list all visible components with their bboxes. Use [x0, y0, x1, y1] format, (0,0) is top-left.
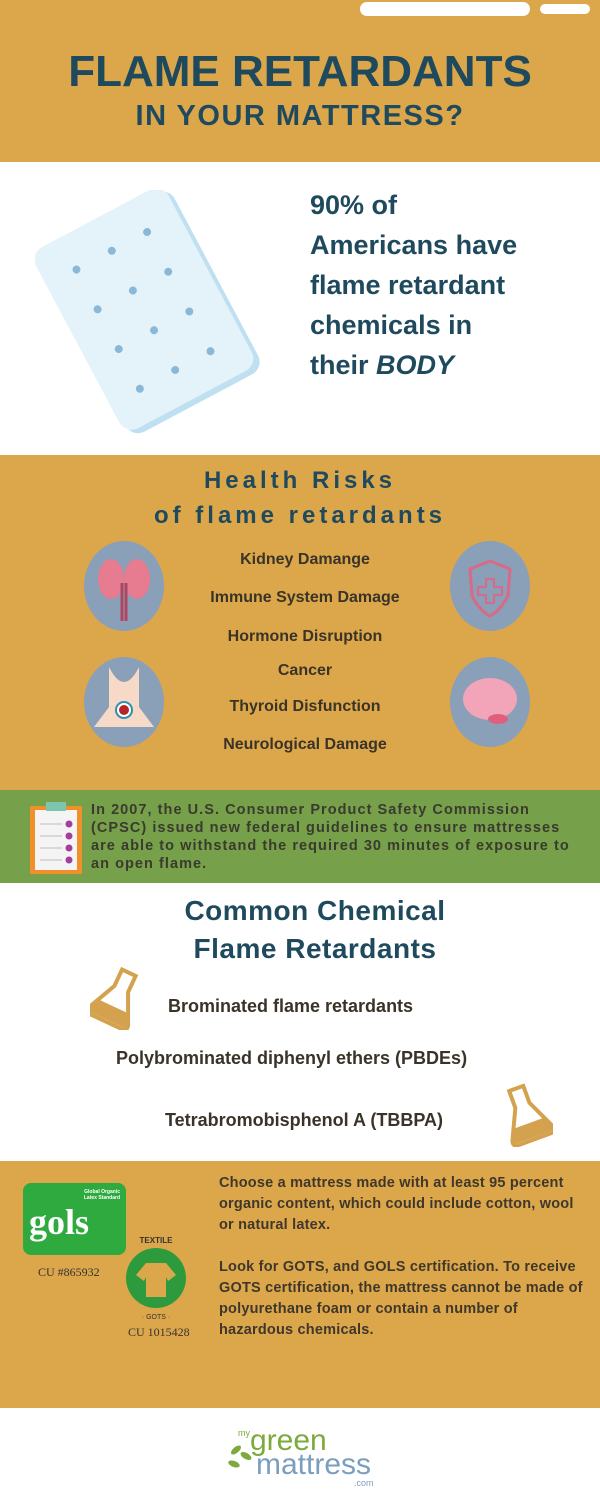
risk list: Kidney Damange	[240, 551, 370, 568]
icon: flask 1	[90, 966, 138, 1030]
title: IN YOUR MATTRESS?	[136, 100, 464, 132]
text: Polybrominated diphenyl ethers (PBDEs)	[116, 1048, 467, 1068]
title: FLAME RETARDANTS	[68, 47, 532, 96]
note text	[91, 802, 570, 872]
advice text: hazardous chemicals.	[219, 1322, 374, 1338]
stat text: Americans have	[310, 230, 517, 260]
advice text: Look for GOTS, and GOLS certification. To receive	[219, 1259, 576, 1275]
cloud decoration	[360, 2, 590, 16]
logo: mygreenmattress: green	[250, 1424, 327, 1457]
heading: Health Risks	[204, 467, 396, 494]
panel: certification	[0, 1161, 600, 1408]
stat text: flame retardant	[310, 270, 505, 300]
GOLS logo: Latex Standard	[84, 1195, 120, 1201]
risk list	[210, 551, 400, 753]
risk list: Thyroid Disfunction	[229, 698, 381, 715]
advice text	[219, 1175, 583, 1338]
risk list: Hormone Disruption	[228, 628, 382, 645]
text: Brominated flame retardants	[168, 996, 413, 1016]
GOTS code: CU 1015428	[128, 1325, 190, 1339]
icon: clipboard	[30, 802, 82, 874]
heading: common chemicals: Flame Retardants	[194, 933, 436, 964]
logo: mygreenmattress	[228, 1424, 374, 1488]
title	[68, 47, 532, 132]
logo: mygreenmattress: .com	[354, 1478, 374, 1488]
GOLS logo: gols	[29, 1202, 89, 1242]
icon: thyroid	[84, 657, 164, 747]
note text: (CPSC) issued new federal guidelines to ensure mattresses	[91, 820, 560, 836]
logo: mygreenmattress: my	[238, 1428, 250, 1438]
risk list: Cancer	[278, 662, 332, 679]
header band	[0, 0, 600, 162]
GOLS logo	[23, 1183, 126, 1255]
stat text: chemicals in	[310, 310, 472, 340]
chemical list	[116, 996, 467, 1130]
risk list: Immune System Damage	[210, 589, 400, 606]
risk list: Neurological Damage	[223, 736, 387, 753]
stat text	[310, 190, 517, 380]
heading	[154, 467, 446, 529]
icon: shield	[450, 541, 530, 631]
heading: common chemicals: Common Chemical	[184, 895, 446, 926]
panel: CPSC note	[0, 790, 600, 883]
icon: brain	[450, 657, 530, 747]
note text: In 2007, the U.S. Consumer Product Safety Commission	[91, 802, 530, 818]
logo: mygreenmattress: mattress	[256, 1448, 371, 1481]
GOTS logo	[126, 1236, 186, 1321]
GOTS logo: TEXTILE	[140, 1236, 173, 1245]
panel: health risks	[0, 455, 600, 790]
stat text: their BODY	[310, 350, 454, 380]
stat text: 90% of	[310, 190, 397, 220]
GOLS logo: Global Organic	[84, 1189, 120, 1195]
note text: an open flame.	[91, 856, 207, 872]
icon: flask 2	[506, 1083, 553, 1147]
mattress illustration	[35, 190, 260, 434]
icon: kidneys	[84, 541, 164, 631]
advice text: organic content, which could include cotton, wool	[219, 1196, 574, 1212]
note text: are able to withstand the required 30 minutes of exposure to	[91, 838, 570, 854]
heading: common chemicals	[184, 895, 446, 964]
GOTS logo: · GOTS ·	[142, 1314, 170, 1321]
text: Tetrabromobisphenol A (TBBPA)	[165, 1110, 443, 1130]
advice text: Choose a mattress made with at least 95 percent	[219, 1175, 564, 1191]
advice text: GOTS certification, the mattress cannot be made of	[219, 1280, 583, 1296]
advice text: polyurethane foam or contain a number of	[219, 1301, 518, 1317]
GOLS code: CU #865932	[38, 1265, 100, 1279]
heading: of flame retardants	[154, 502, 446, 529]
advice text: or natural latex.	[219, 1217, 330, 1233]
